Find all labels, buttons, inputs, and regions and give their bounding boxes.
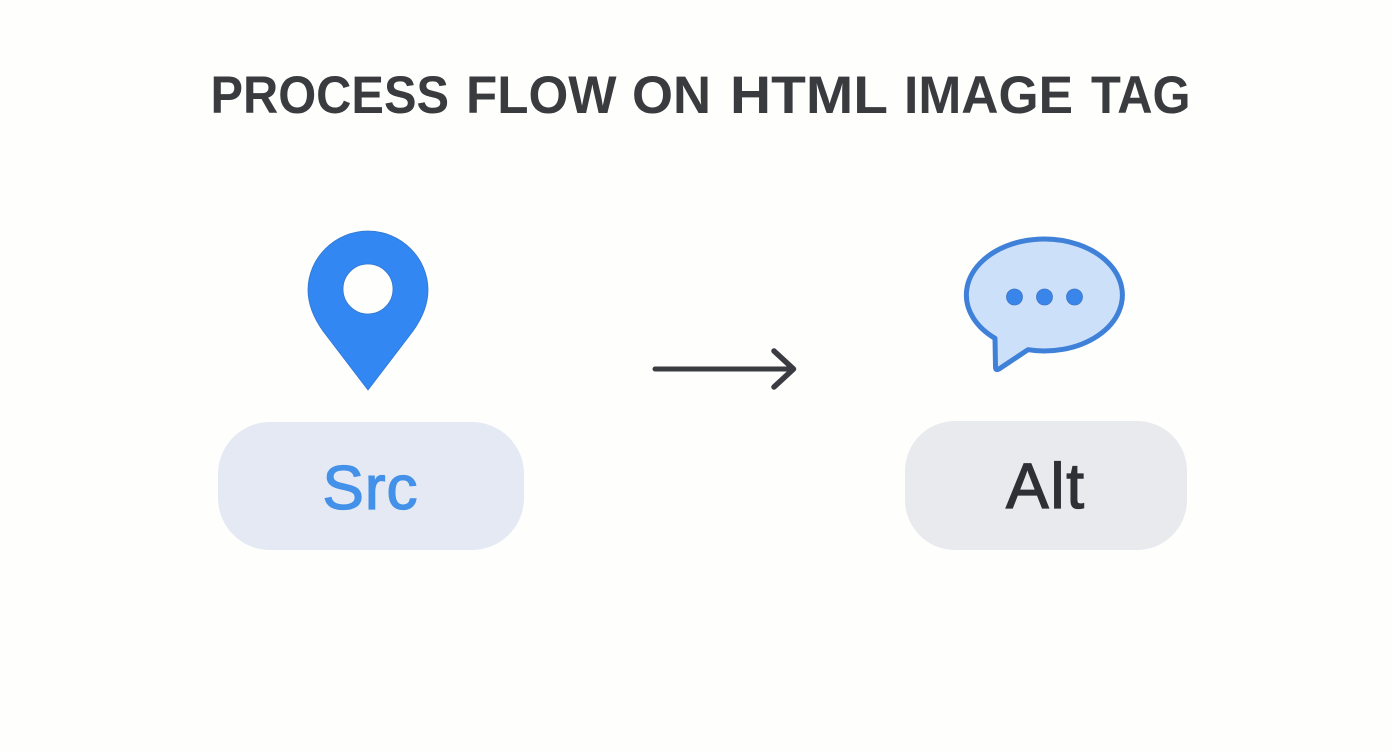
title: PROCESS xyxy=(210,66,449,125)
title: ON xyxy=(632,66,711,125)
title xyxy=(210,66,1190,125)
icon: bubble dots xyxy=(1006,289,1082,305)
title: FLOW xyxy=(466,66,617,125)
arrow xyxy=(655,351,794,387)
title: TAG xyxy=(1091,66,1190,125)
pill: Alt xyxy=(905,421,1187,550)
title: HTML xyxy=(730,66,888,125)
pill: Alt: Alt xyxy=(1006,450,1084,522)
pill: Src: Src xyxy=(322,454,418,523)
title: IMAGE xyxy=(904,66,1073,125)
pill: Src xyxy=(218,422,524,550)
icon: location pin xyxy=(308,231,428,390)
icon: speech bubble xyxy=(966,239,1122,370)
